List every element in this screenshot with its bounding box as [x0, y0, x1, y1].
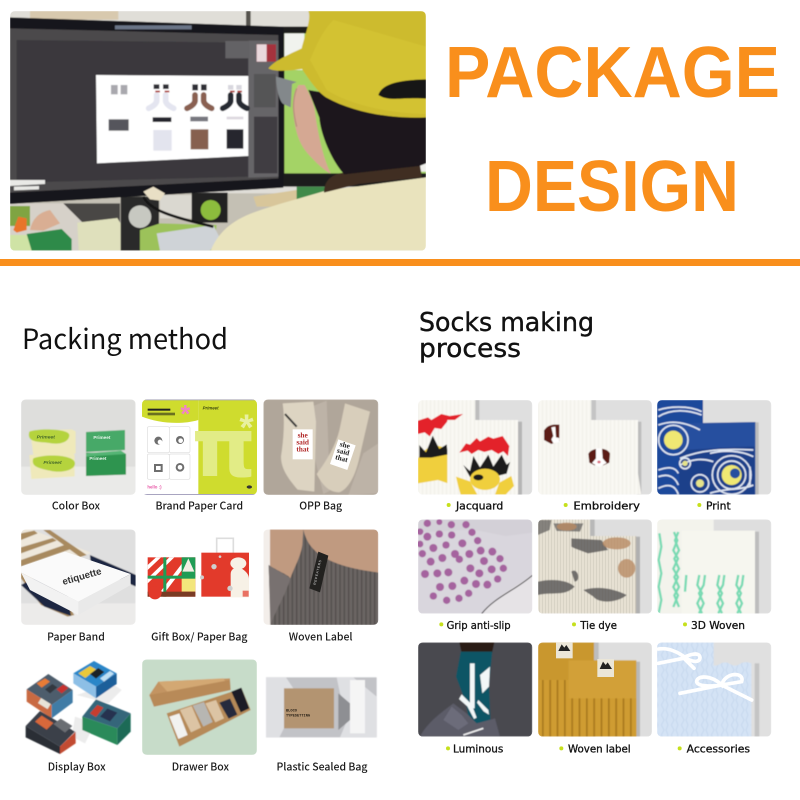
card: Color Box: Primeet [89, 456, 107, 461]
title: PACKAGE DESIGN: PACKAGE [445, 33, 780, 113]
card: Color Box [21, 399, 136, 513]
mini cards [147, 427, 190, 479]
card: Drawer Box [142, 659, 257, 774]
card: Woven label [538, 642, 652, 756]
label: Display Box [48, 759, 106, 774]
panel: packing method grid [21, 399, 378, 774]
card: Tie dye [538, 519, 652, 632]
process row 2 [417, 519, 771, 632]
label: Woven Label [289, 629, 353, 644]
card: Brand Paper Card [142, 399, 257, 513]
card: Brand Paper Card: * [180, 401, 190, 429]
card: Color Box: Primeet [93, 435, 111, 440]
card: Brand Paper Card: π [192, 401, 256, 496]
card: OPP Bag: said [336, 446, 351, 458]
card: 3D Woven [657, 519, 771, 632]
artboard [96, 75, 248, 163]
hero photo: designer at monitor [10, 11, 426, 251]
label: Print [706, 500, 731, 512]
heading: Packing method: Packing method [22, 318, 228, 358]
card: Accessories [657, 642, 771, 756]
bows [658, 649, 752, 700]
label: Paper Band [47, 629, 105, 644]
box left [27, 674, 73, 705]
label: OPP Bag [299, 498, 342, 513]
label: Plastic Sealed Bag [277, 759, 367, 774]
title: PACKAGE DESIGN [445, 33, 780, 227]
cap [268, 11, 426, 118]
label: 3D Woven [691, 620, 745, 632]
label: Brand Paper Card [156, 498, 243, 513]
card: Brand Paper Card: hello :) [147, 485, 162, 490]
label: Embroidery [573, 500, 640, 512]
card: Color Box: Primeet [43, 460, 62, 466]
label: Jacquard [455, 500, 503, 512]
card: Luminous [418, 642, 532, 756]
lower desk [25, 192, 272, 236]
label: Drawer Box [172, 759, 229, 774]
tag: she said that [293, 429, 313, 459]
label: Woven label [568, 744, 631, 756]
card: Woven Label [263, 529, 378, 644]
card: Embroidery [538, 400, 652, 512]
title: PACKAGE DESIGN: DESIGN [485, 147, 739, 227]
sock tags [556, 642, 573, 658]
card: Paper Band: etiquette [61, 566, 103, 588]
packing row 3 [21, 659, 378, 774]
shirt [211, 177, 426, 251]
card: Brand Paper Card: Primeet [203, 405, 219, 410]
card: Print [657, 400, 771, 512]
card: OPP Bag: that [296, 444, 310, 453]
heading: Socks making process: process [419, 334, 521, 364]
card: OPP Bag: that [334, 452, 349, 464]
card: Plastic Sealed Bag: BLOCO [286, 710, 298, 714]
orange divider bar [0, 259, 800, 266]
panel: socks making process grid [417, 400, 771, 756]
card: Plastic Sealed Bag: TYPESETTING [286, 714, 311, 718]
packing row 2 [21, 529, 378, 644]
label: Grip anti-slip [447, 620, 511, 632]
heading: Socks making process: Socks making [419, 308, 594, 338]
label: Tie dye [579, 620, 617, 632]
card: Plastic Sealed Bag [266, 676, 378, 773]
card: Jacquard [418, 400, 532, 512]
card: Grip anti-slip [417, 519, 532, 632]
packing row 1 [21, 399, 378, 513]
box lower left [26, 711, 75, 747]
box top right [73, 661, 117, 687]
hair [308, 90, 426, 174]
card: OPP Bag: she [298, 430, 308, 439]
glasses [276, 77, 297, 107]
heading: Socks making process [419, 308, 594, 364]
card: OPP Bag [263, 399, 378, 513]
process row 1 [418, 400, 771, 512]
label: Color Box [52, 498, 101, 513]
card: Color Box: Primeet [37, 435, 55, 441]
card: OPP Bag: she [339, 439, 352, 451]
ear and face [293, 85, 331, 173]
woven tag: REPEATERS [313, 559, 322, 585]
box lower right [82, 699, 131, 728]
label: Accessories [687, 744, 750, 756]
card: Display Box [21, 659, 136, 774]
card: OPP Bag: said [296, 437, 309, 446]
card: Paper Band [21, 529, 136, 644]
label: Gift Box/ Paper Bag [151, 629, 247, 644]
card: Gift Box / Paper Bag [148, 538, 249, 643]
main monitor [10, 17, 283, 204]
second monitor [283, 27, 426, 187]
label: Luminous [453, 744, 503, 756]
process row 3 [418, 642, 771, 756]
card: Brand Paper Card: * [239, 407, 254, 448]
